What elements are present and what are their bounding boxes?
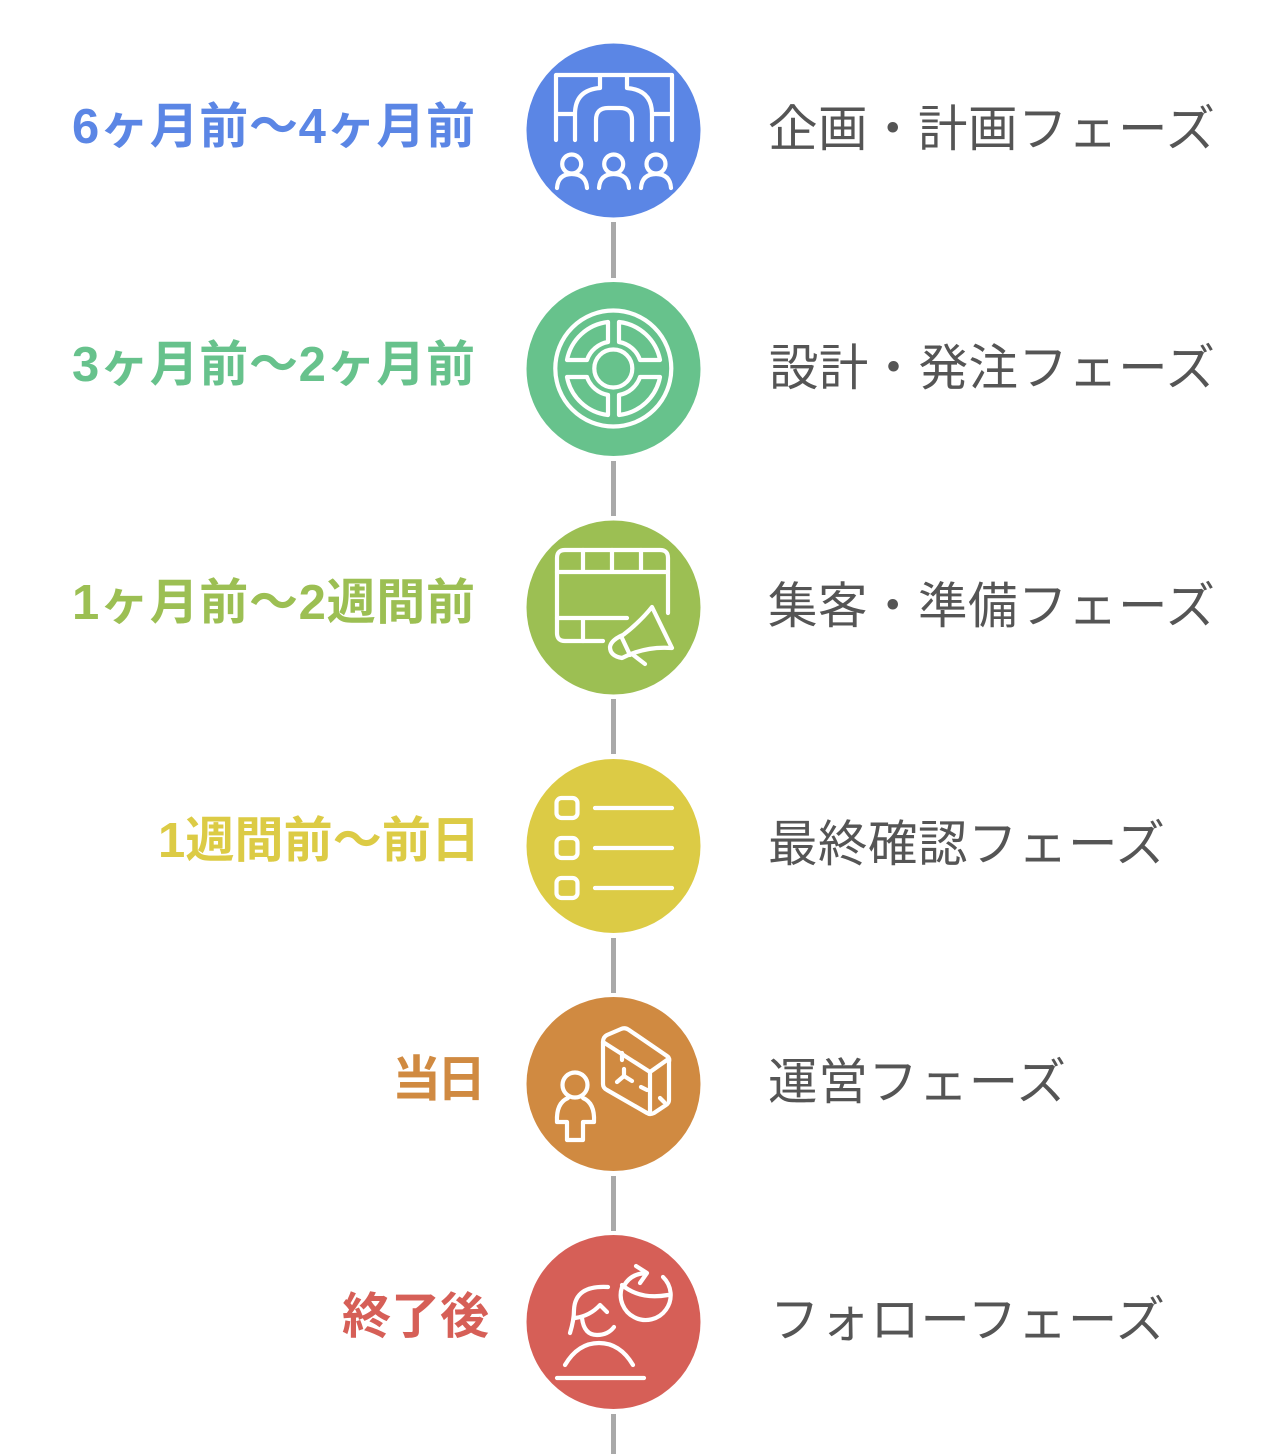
timing label 4: 1週間前〜前日 bbox=[158, 814, 480, 868]
phase label 4: 最終確認フェーズ bbox=[768, 817, 1165, 872]
phase label 1: 企画・計画フェーズ bbox=[768, 102, 1215, 157]
connector 2 bbox=[611, 461, 616, 516]
step 6: フォローフェーズ bbox=[342, 1235, 1165, 1409]
timing label 6: 終了後 bbox=[342, 1290, 489, 1344]
timing label 2: 3ヶ月前〜2ヶ月前 bbox=[72, 338, 475, 392]
step 1: 企画・計画フェーズ bbox=[72, 44, 1215, 218]
step 5: 運営フェーズ bbox=[392, 997, 1066, 1171]
connector 6 bbox=[611, 1414, 616, 1454]
circle 6 bbox=[526, 1235, 700, 1409]
connector 5 bbox=[611, 1176, 616, 1231]
timing label 5: 当日 bbox=[392, 1053, 486, 1107]
connector 4 bbox=[611, 938, 616, 993]
phase label 2: 設計・発注フェーズ bbox=[769, 341, 1215, 396]
icon: person with rotating globe bbox=[557, 1266, 671, 1378]
step 3: 集客・準備フェーズ bbox=[72, 520, 1215, 694]
icon: circular floor plan bbox=[555, 310, 671, 426]
circle 4 bbox=[526, 759, 700, 933]
connector 1 bbox=[611, 222, 616, 278]
icon: checklist bbox=[556, 798, 672, 898]
icon: calendar with megaphone bbox=[557, 550, 672, 664]
circle 2 bbox=[526, 282, 700, 456]
icon: venue floor plan with people bbox=[556, 75, 672, 188]
timing label 1: 6ヶ月前〜4ヶ月前 bbox=[72, 100, 475, 154]
timing label 3: 1ヶ月前〜2週間前 bbox=[72, 576, 475, 630]
phase label 5: 運営フェーズ bbox=[768, 1055, 1066, 1110]
circle 1 bbox=[526, 44, 700, 218]
connector 3 bbox=[611, 699, 616, 754]
circle 3 bbox=[526, 520, 700, 694]
icon: person and booth box bbox=[557, 1028, 669, 1140]
phase label 6: フォローフェーズ bbox=[770, 1293, 1165, 1348]
circle 5 bbox=[526, 997, 700, 1171]
phase label 3: 集客・準備フェーズ bbox=[768, 579, 1215, 634]
step 4: 最終確認フェーズ bbox=[158, 759, 1165, 933]
step 2: 設計・発注フェーズ bbox=[72, 282, 1215, 456]
